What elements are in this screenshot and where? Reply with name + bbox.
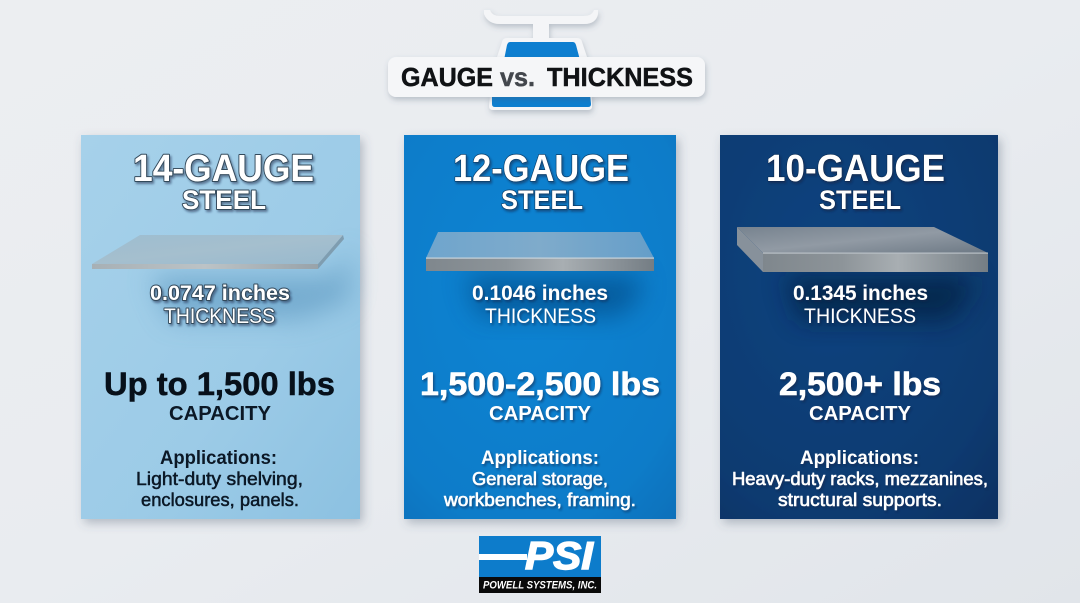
- panel: 10-gauge steel: [720, 135, 998, 519]
- capacity: 10-gauge: [779, 366, 941, 425]
- capacity: 12-gauge: CAPACITY: [489, 403, 592, 425]
- steel plate: 10-gauge: [737, 227, 988, 320]
- panel: 14-gauge steel: [81, 135, 360, 519]
- capacity: 14-gauge: CAPACITY: [169, 403, 272, 425]
- panel: 12-gauge steel: [404, 135, 676, 519]
- title: GAUGE: [401, 62, 493, 92]
- capacity: 10-gauge: 2,500+ lbs: [779, 366, 941, 402]
- heading: 14-gauge: 14-GAUGE: [133, 148, 314, 190]
- heading: 10-gauge: [766, 148, 945, 215]
- capacity: 12-gauge: [420, 366, 660, 425]
- applications: 14-gauge: [136, 448, 303, 510]
- applications: 12-gauge: General storage,: [472, 469, 608, 489]
- applications: 10-gauge: Heavy-duty racks, mezzanines,: [732, 469, 988, 489]
- applications: 10-gauge: Applications:: [800, 448, 919, 469]
- thickness: 12-gauge: 0.1046 inches: [472, 282, 608, 305]
- thickness: 10-gauge: [793, 282, 928, 328]
- thickness: 14-gauge: 0.0747 inches: [150, 282, 290, 305]
- steel plate: 12-gauge: [426, 232, 654, 316]
- capacity: 14-gauge: [104, 366, 335, 425]
- heading: 14-gauge: [133, 148, 314, 215]
- capacity: 14-gauge: Up to 1,500 lbs: [104, 366, 335, 402]
- applications: 10-gauge: [732, 448, 988, 510]
- heading: 12-gauge: 12-GAUGE: [453, 148, 629, 190]
- heading: 10-gauge: 10-GAUGE: [766, 148, 945, 190]
- applications: 12-gauge: Applications:: [481, 448, 599, 469]
- heading: 10-gauge: STEEL: [819, 185, 901, 215]
- heading: 12-gauge: STEEL: [501, 185, 583, 215]
- capacity: 12-gauge: 1,500-2,500 lbs: [420, 366, 660, 402]
- heading: 14-gauge: STEEL: [182, 185, 266, 215]
- applications: 12-gauge: [443, 448, 636, 510]
- applications: 12-gauge: workbenches, framing.: [443, 490, 636, 510]
- thickness: 12-gauge: THICKNESS: [485, 305, 596, 328]
- applications: 14-gauge: Applications:: [160, 448, 277, 469]
- applications: 14-gauge: enclosures, panels.: [141, 490, 299, 510]
- thickness: 14-gauge: [150, 282, 290, 328]
- logo: Powell Systems, Inc.: PSI: [525, 535, 594, 578]
- steel plate: 14-gauge: [92, 235, 350, 320]
- capacity: 10-gauge: CAPACITY: [809, 403, 912, 425]
- heading: 12-gauge: [453, 148, 629, 215]
- title: vs.: [500, 62, 535, 92]
- title: [388, 57, 705, 97]
- logo: Powell Systems, Inc.: [479, 535, 601, 593]
- applications: 14-gauge: Light-duty shelving,: [136, 469, 303, 489]
- thickness: 14-gauge: THICKNESS: [164, 305, 275, 328]
- thickness: 10-gauge: 0.1345 inches: [793, 282, 928, 305]
- applications: 10-gauge: structural supports.: [778, 490, 942, 510]
- title: THICKNESS: [547, 62, 693, 92]
- thickness: 10-gauge: THICKNESS: [804, 305, 916, 328]
- icon: weighing scale: [484, 10, 598, 110]
- thickness: 12-gauge: [472, 282, 608, 328]
- logo: Powell Systems, Inc.: POWELL SYSTEMS, INC.: [483, 580, 597, 592]
